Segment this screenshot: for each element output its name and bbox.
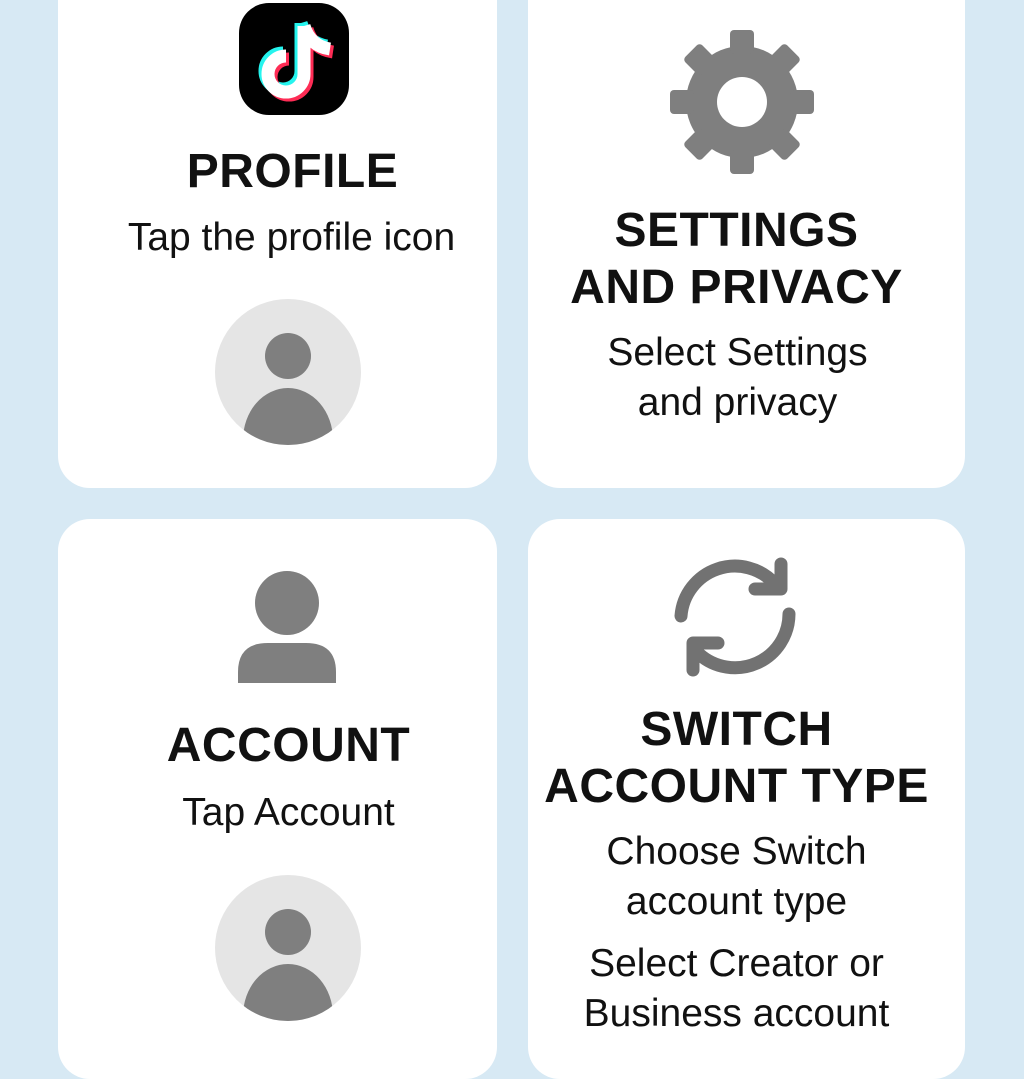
text: tap profile icon: Tap the profile icon bbox=[128, 216, 455, 259]
text: select settings: Select Settings bbox=[607, 331, 868, 374]
heading: settings and privacy: AND PRIVACY bbox=[570, 261, 903, 314]
heading: settings and privacy bbox=[570, 204, 903, 314]
text: choose switch: Choose Switch bbox=[606, 830, 867, 873]
heading: account: ACCOUNT bbox=[167, 719, 410, 772]
text: select creator: Business account bbox=[584, 992, 889, 1035]
panel: settings bbox=[528, 0, 965, 488]
heading: settings and privacy: SETTINGS bbox=[614, 204, 859, 257]
text: select creator bbox=[584, 942, 890, 1035]
panel: switch account type bbox=[528, 519, 965, 1079]
heading: switch account type: SWITCH bbox=[640, 703, 833, 756]
icon: gear bbox=[670, 30, 814, 174]
text: choose switch: account type bbox=[626, 880, 847, 923]
heading: switch account type: ACCOUNT TYPE bbox=[544, 760, 929, 813]
heading: switch account type bbox=[544, 703, 929, 813]
text: select settings: and privacy bbox=[638, 381, 837, 424]
text: select creator: Select Creator or bbox=[589, 942, 884, 985]
icon: profile avatar bbox=[215, 299, 361, 445]
icon: switch arrows bbox=[681, 564, 789, 670]
heading: profile: PROFILE bbox=[187, 145, 398, 198]
text: tap account: Tap Account bbox=[182, 791, 395, 834]
icon: account person bbox=[238, 571, 336, 683]
panel: profile bbox=[58, 0, 497, 488]
icon: account avatar bbox=[215, 875, 361, 1021]
panel: account bbox=[58, 519, 497, 1079]
text: choose switch bbox=[606, 830, 867, 923]
text: select settings bbox=[607, 331, 868, 424]
icon: tiktok logo bbox=[239, 3, 349, 115]
